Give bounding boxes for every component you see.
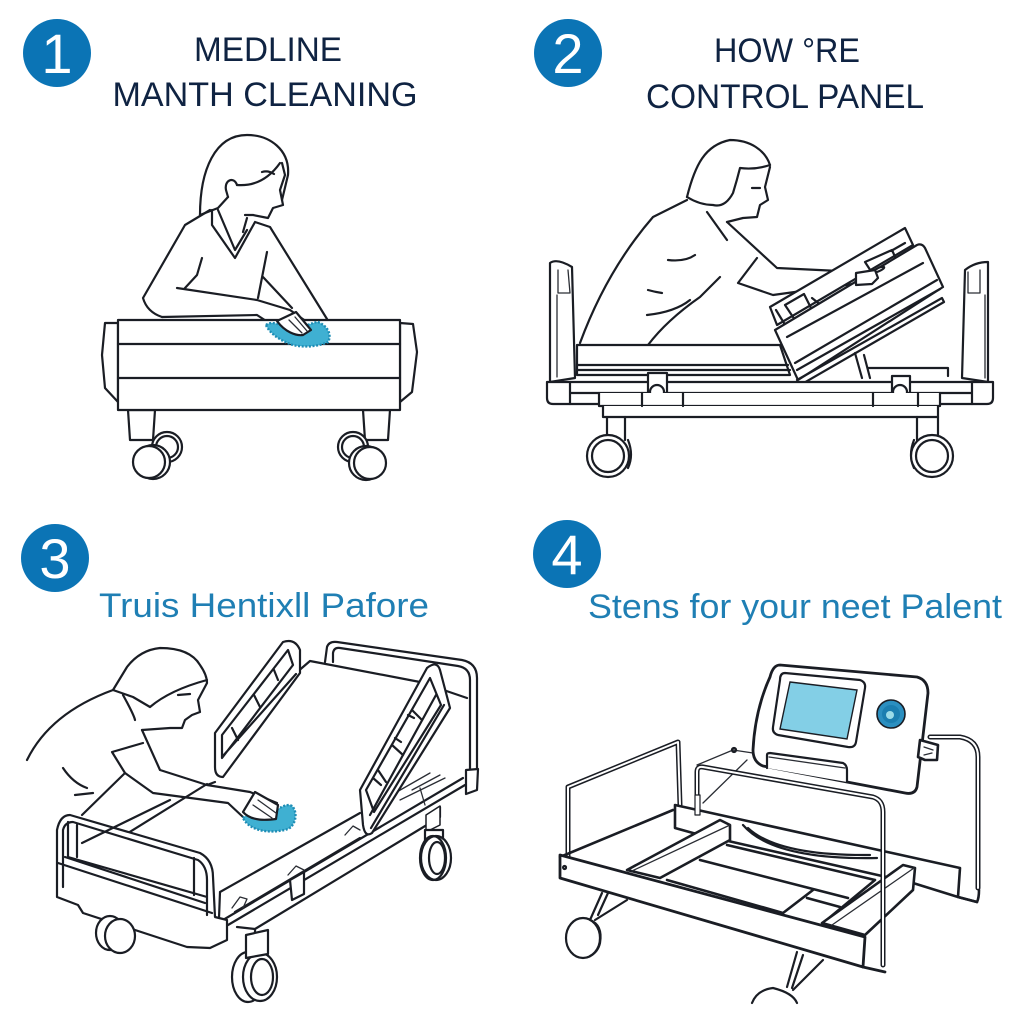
heading: step 3: Truis Hentixll Pafore [99,587,429,625]
wheels and legs [590,893,627,920]
panel: step 4 [533,520,1003,1003]
heading: step 4: Stens for your neet Palent [588,588,1003,626]
wheels [96,916,277,1002]
badge: number 3: 3 [39,527,71,590]
front band [560,855,865,967]
rails at back [568,742,680,860]
left side rail [215,641,300,777]
badge: number 3 [21,524,89,592]
illustration: woman wiping bed [102,135,417,480]
icon: blue cloth [266,322,330,346]
badge: number 4 [533,520,601,588]
heading: step 2: CONTROL PANEL [646,78,924,116]
heading: step 2: HOW °RE [714,32,860,70]
badge: number 2: 2 [552,22,584,85]
side frame [223,778,465,938]
heading: step 1: MEDLINE [194,31,342,69]
heading: step 1 [112,31,418,114]
icon: hand [277,312,311,335]
panel: step 3 [21,524,478,1002]
person [27,648,207,760]
far wheel [425,830,443,845]
right side rail [360,664,450,834]
headboard [325,642,477,770]
illustration: woman adjusting bed panel [547,140,993,477]
badge: number 1: 1 [41,22,73,85]
control panel (tilted) [770,228,944,384]
illustration: bed frame with control monitor [560,665,979,1003]
monitor [753,665,928,793]
heading: step 2 [646,32,924,116]
mattress [82,661,420,918]
icon: blue cloth [243,805,295,831]
badge: number 2 [534,19,602,87]
bed floor slats [560,810,915,935]
heading: step 1: MANTH CLEANING [112,76,418,114]
back band [675,805,977,902]
footboard and base [57,815,227,948]
back arc [743,825,877,858]
panel: step 1 [23,19,418,480]
badge: number 1 [23,19,91,87]
illustration: woman wiping mattress with rails [27,641,478,1002]
panel: step 2 [534,19,993,477]
front rail [697,767,883,965]
icon: hand [243,792,278,820]
badge: number 4: 4 [551,523,583,586]
